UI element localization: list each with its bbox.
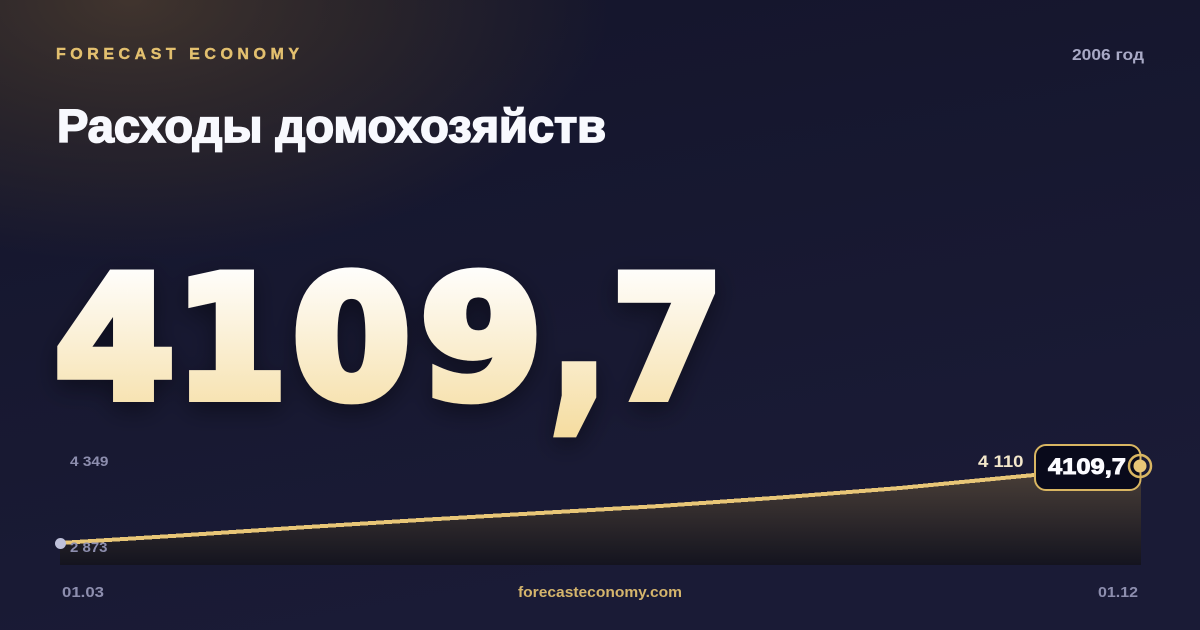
- big value: [55, 219, 723, 452]
- year label: 2006 год: [1072, 47, 1144, 64]
- end point marker: [1129, 455, 1151, 477]
- big value: 1: [175, 241, 287, 437]
- brand label: FORECAST ECONOMY: [56, 46, 299, 63]
- end date: 01.12: [1098, 584, 1138, 601]
- title: Расходы домохозяйств: [57, 100, 606, 152]
- start point marker: [55, 538, 66, 549]
- source url: forecasteconomy.com: [518, 585, 682, 601]
- axis max label: 4 349: [70, 453, 109, 469]
- area chart: [55, 445, 1151, 565]
- chart area fill: [60, 466, 1141, 565]
- callout: 4109,7: [1048, 454, 1126, 479]
- axis min label: 2 873: [70, 539, 108, 555]
- big value: 9: [420, 241, 542, 437]
- big value: 4: [55, 241, 175, 437]
- big value: ,: [550, 219, 608, 452]
- end value label: 4 110: [978, 453, 1024, 471]
- big value: 7: [612, 241, 723, 437]
- chart line: [60, 466, 1141, 543]
- callout: [1035, 445, 1140, 490]
- start date: 01.03: [62, 584, 104, 601]
- big value: 0: [292, 241, 410, 437]
